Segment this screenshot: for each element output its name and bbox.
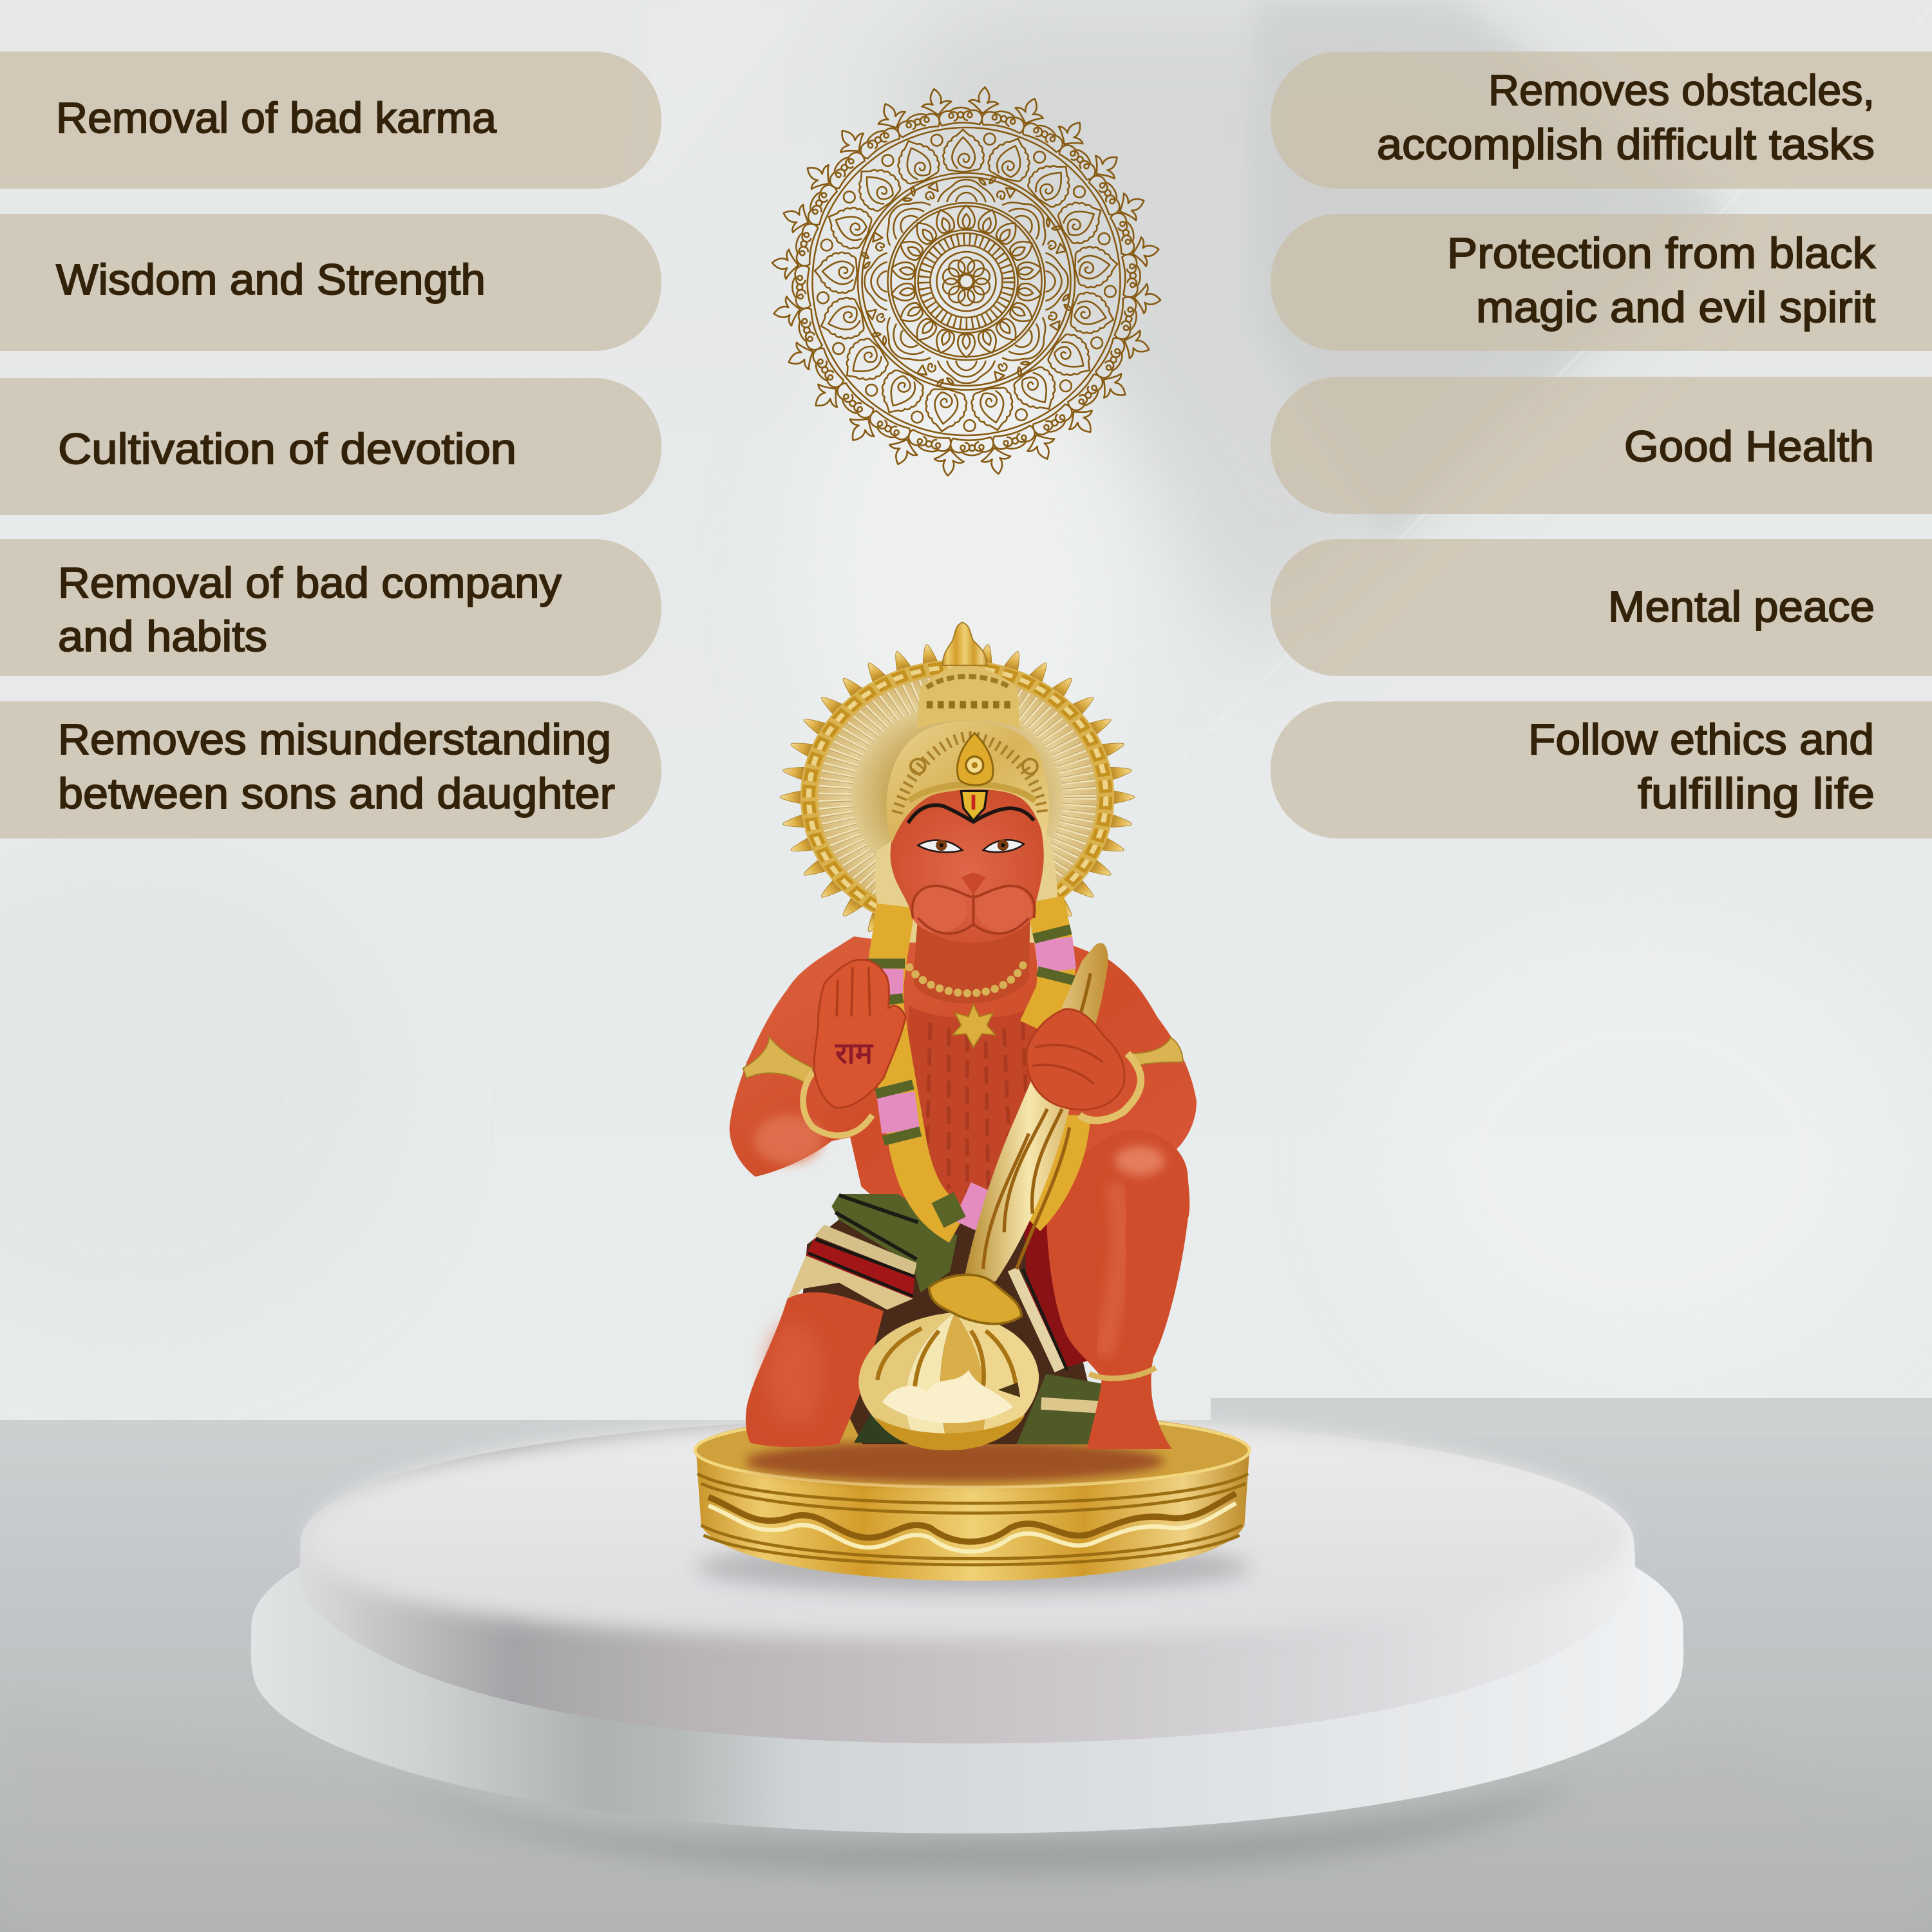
podium: upper disc top face <box>308 1419 1627 1639</box>
podium: lower disc <box>251 1465 1683 1833</box>
pill: Protection from black magic: Protection from black <box>1447 229 1876 278</box>
pill: Removes misunderstanding between sons and daughter: Removes misunderstanding <box>58 715 611 764</box>
statue: mace shaft <box>963 943 1108 1282</box>
statue: right leg and foot <box>1046 1130 1189 1449</box>
pill: Wisdom and Strength: Wisdom and Strength <box>56 256 486 304</box>
podium <box>251 1417 1683 1833</box>
statue: crown upper tier <box>916 663 1020 730</box>
pill: Follow ethics <box>1271 701 1932 838</box>
statue: round gold base <box>695 1411 1249 1581</box>
statue: crown jewel <box>957 733 993 785</box>
statue: tilak <box>961 791 987 820</box>
statue: neck <box>914 918 1030 1003</box>
statue: torso and arms <box>730 936 1197 1214</box>
pill: Removal of bad karma <box>0 52 661 189</box>
statue: mace ball <box>858 1312 1039 1450</box>
statue: necklace with star pendant <box>909 961 1025 1047</box>
statue: Ram inscription on palm: राम <box>835 1036 873 1070</box>
statue: armbands and bangles <box>743 1036 1183 1135</box>
panel: left benefit list <box>0 52 661 838</box>
statue: head and face <box>891 786 1044 943</box>
statue: crown dome and finial <box>943 622 987 665</box>
pill: Cultivation of devotion <box>0 378 661 515</box>
pill: Cultivation of devotion: Cultivation of devotion <box>58 425 516 473</box>
pill: Removes obstacles: Removes obstacles, <box>1488 66 1875 115</box>
pill: Removal of bad company and habits: and habits <box>58 612 267 661</box>
statue: dhoti cloth <box>784 1194 1103 1444</box>
pill: Removes obstacles: accomplish difficult tasks <box>1377 120 1875 169</box>
statue shadow <box>696 1542 1251 1592</box>
statue: Hanuman figure <box>695 622 1249 1581</box>
pill: Removes misunderstanding between sons and daughter: between sons and daughter <box>58 770 615 818</box>
pill: Mental peace <box>1271 539 1932 676</box>
podium: upper disc side <box>300 1417 1635 1743</box>
pill: Removal of bad karma: Removal of bad karma <box>56 94 497 142</box>
statue: gold hair behind head <box>875 788 1058 955</box>
statue: gold mace <box>858 943 1108 1450</box>
statue: crown main body <box>887 721 1049 843</box>
pill: Follow ethics: Follow ethics and <box>1528 715 1874 764</box>
pill: Mental peace: Mental peace <box>1608 583 1875 631</box>
statue: gold crown <box>887 622 1049 843</box>
pill: Removes misunderstanding between sons and daughter <box>0 701 661 838</box>
statue: muzzle <box>911 886 967 933</box>
statue: fist gripping mace <box>1027 1009 1124 1110</box>
pill: Protection from black magic <box>1271 214 1932 351</box>
statue: brow <box>908 805 1034 823</box>
pill: Good Health: Good Health <box>1624 422 1874 471</box>
statue: left knee <box>746 1293 884 1447</box>
pill: Removal of bad company and habits: Removal of bad company <box>58 559 562 607</box>
floor <box>0 1398 1932 1932</box>
statue: flower garland <box>884 900 1074 1226</box>
statue: anklet <box>1089 1368 1156 1378</box>
pill: Protection from black magic: magic and evil spirit <box>1476 283 1875 332</box>
statue: gold halo <box>770 633 1145 961</box>
statue: chest fur <box>905 1004 1047 1214</box>
pill: Follow ethics: fulfilling life <box>1638 770 1875 818</box>
icon: gold mandala <box>771 86 1162 477</box>
pill: Removal of bad company and habits <box>0 539 661 676</box>
panel: right benefit list <box>1271 52 1932 838</box>
pill: Removes obstacles <box>1271 52 1932 189</box>
statue: raised blessing hand <box>814 960 905 1108</box>
pill: Good Health <box>1271 377 1932 514</box>
pill: Wisdom and Strength <box>0 214 661 351</box>
statue: mace knot <box>929 1274 1021 1324</box>
statue: eyes <box>918 840 1024 852</box>
